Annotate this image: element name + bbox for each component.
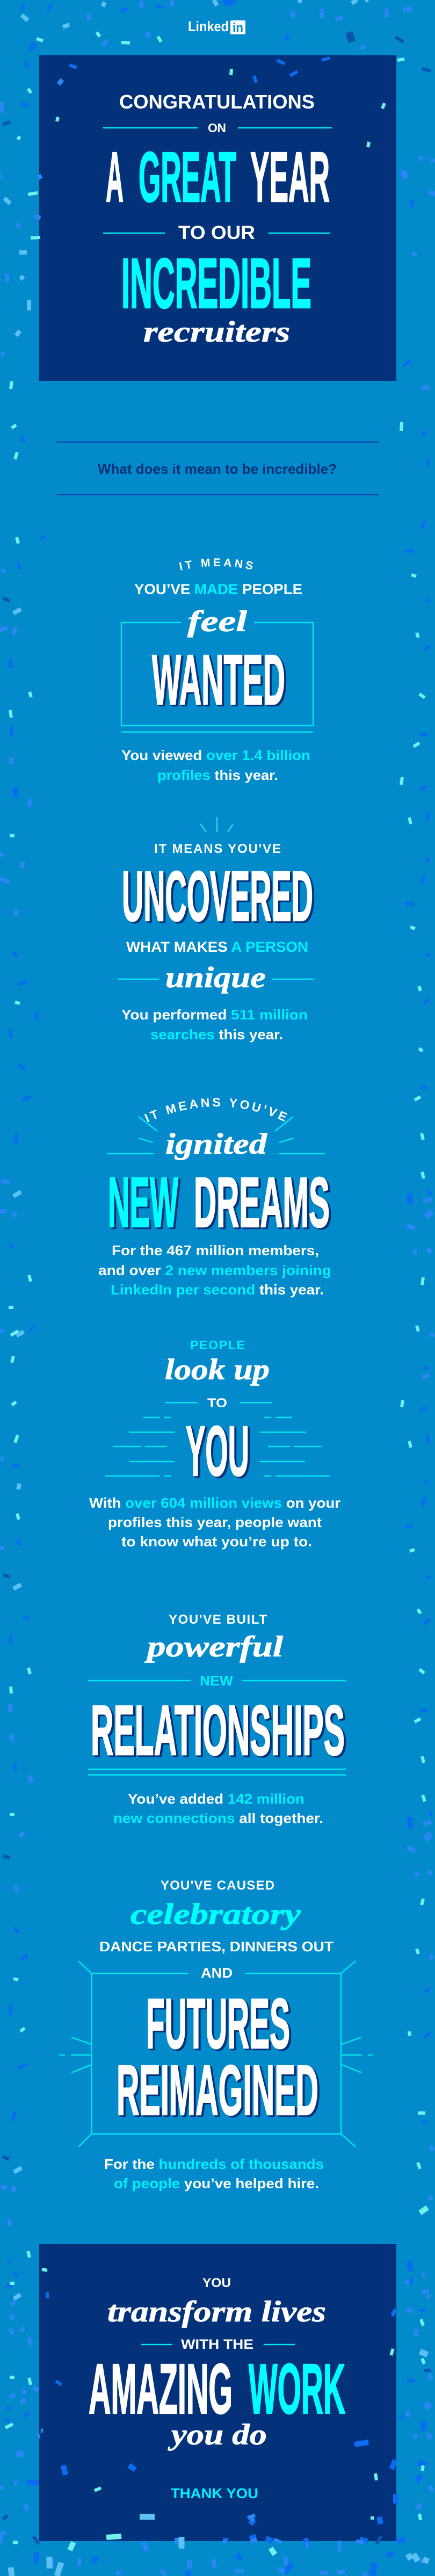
section: ignited new dreams: IT MEANS YOU'VE bbox=[144, 1098, 288, 1123]
section: celebratory futures reimagined: celebratory bbox=[130, 1898, 301, 1930]
heading: closing panel: transform lives bbox=[107, 2295, 326, 2328]
section: look up to you: look up bbox=[165, 1353, 270, 1386]
panel: closing background bbox=[39, 2244, 396, 2541]
section: uncovered unique: unique bbox=[165, 961, 266, 994]
section: powerful new relationships: powerful bbox=[144, 1630, 284, 1663]
section: powerful new relationships: new connections all together. bbox=[113, 1810, 323, 1826]
section: look up to you: TO bbox=[207, 1396, 227, 1410]
panel: header background bbox=[39, 55, 396, 381]
section: look up to you: to know what you’re up to. bbox=[121, 1533, 312, 1550]
question banner bbox=[56, 442, 379, 495]
logo: LinkedIn: Linked bbox=[188, 18, 229, 34]
section: celebratory futures reimagined: For the hundreds of thousands bbox=[104, 2156, 324, 2172]
section: feel wanted bbox=[120, 559, 314, 783]
section: uncovered unique: searches this year. bbox=[150, 1026, 283, 1043]
section: uncovered unique: WHAT MAKES A PERSON bbox=[126, 939, 308, 955]
heading: closing panel: THANK YOU bbox=[171, 2485, 258, 2501]
heading: header panel: recruiters bbox=[143, 315, 290, 348]
section: feel wanted: IT MEANS bbox=[179, 559, 253, 570]
section: powerful new relationships bbox=[88, 1612, 346, 1826]
section: feel wanted: YOU’VE MADE PEOPLE bbox=[134, 581, 302, 597]
heading: header panel: ON bbox=[208, 121, 226, 135]
section: powerful new relationships: YOU'VE BUILT bbox=[169, 1612, 267, 1627]
section: uncovered unique bbox=[118, 817, 314, 1043]
question banner: What does it mean to be incredible? bbox=[98, 461, 337, 477]
section: feel wanted: profiles this year. bbox=[157, 767, 278, 783]
section: look up to you: profiles this year, people want bbox=[108, 1514, 322, 1530]
section: uncovered unique: IT MEANS YOU'VE bbox=[154, 842, 281, 856]
heading: header panel: A bbox=[106, 138, 124, 216]
logo: LinkedIn: in bbox=[233, 20, 243, 35]
section: look up to you: YOU bbox=[186, 1412, 249, 1490]
section: look up to you: With over 604 million views on your bbox=[89, 1495, 340, 1511]
heading: header panel: CONGRATULATIONS bbox=[119, 91, 315, 113]
section: uncovered unique: You performed 511 million bbox=[121, 1007, 308, 1023]
section: powerful new relationships: You’ve added 142 million bbox=[128, 1791, 305, 1807]
heading: closing panel: AMAZING bbox=[89, 2349, 233, 2428]
section: look up to you bbox=[89, 1338, 340, 1550]
section: ignited new dreams bbox=[98, 1098, 331, 1298]
section: celebratory futures reimagined: AND bbox=[201, 1965, 233, 1981]
section: ignited new dreams: and over 2 new members joining bbox=[98, 1262, 331, 1278]
section: celebratory futures reimagined bbox=[59, 1878, 373, 2191]
section: ignited new dreams: LinkedIn per second this year. bbox=[111, 1282, 324, 1298]
heading: closing panel: you do bbox=[168, 2418, 267, 2451]
heading: header panel bbox=[103, 91, 332, 348]
section: celebratory futures reimagined: YOU'VE CAUSED bbox=[161, 1878, 274, 1893]
section: ignited new dreams: For the 467 million members, bbox=[112, 1242, 319, 1258]
section: feel wanted: You viewed over 1.4 billion bbox=[121, 747, 310, 763]
heading: closing panel: WITH THE bbox=[181, 2337, 253, 2352]
section: celebratory futures reimagined: DANCE PARTIES, DINNERS OUT bbox=[99, 1938, 334, 1955]
section: celebratory futures reimagined: of people you’ve helped hire. bbox=[114, 2175, 319, 2191]
section: ignited new dreams: NEW bbox=[108, 1163, 178, 1242]
section: feel wanted: feel bbox=[187, 605, 248, 638]
heading: closing panel: YOU bbox=[202, 2276, 231, 2290]
section: powerful new relationships: NEW bbox=[200, 1673, 233, 1689]
section: look up to you: PEOPLE bbox=[190, 1338, 245, 1352]
section: ignited new dreams: ignited bbox=[165, 1127, 268, 1160]
heading: closing panel bbox=[89, 2276, 345, 2501]
heading: header panel: TO OUR bbox=[178, 222, 255, 243]
heading: header panel: GREAT bbox=[139, 138, 236, 216]
